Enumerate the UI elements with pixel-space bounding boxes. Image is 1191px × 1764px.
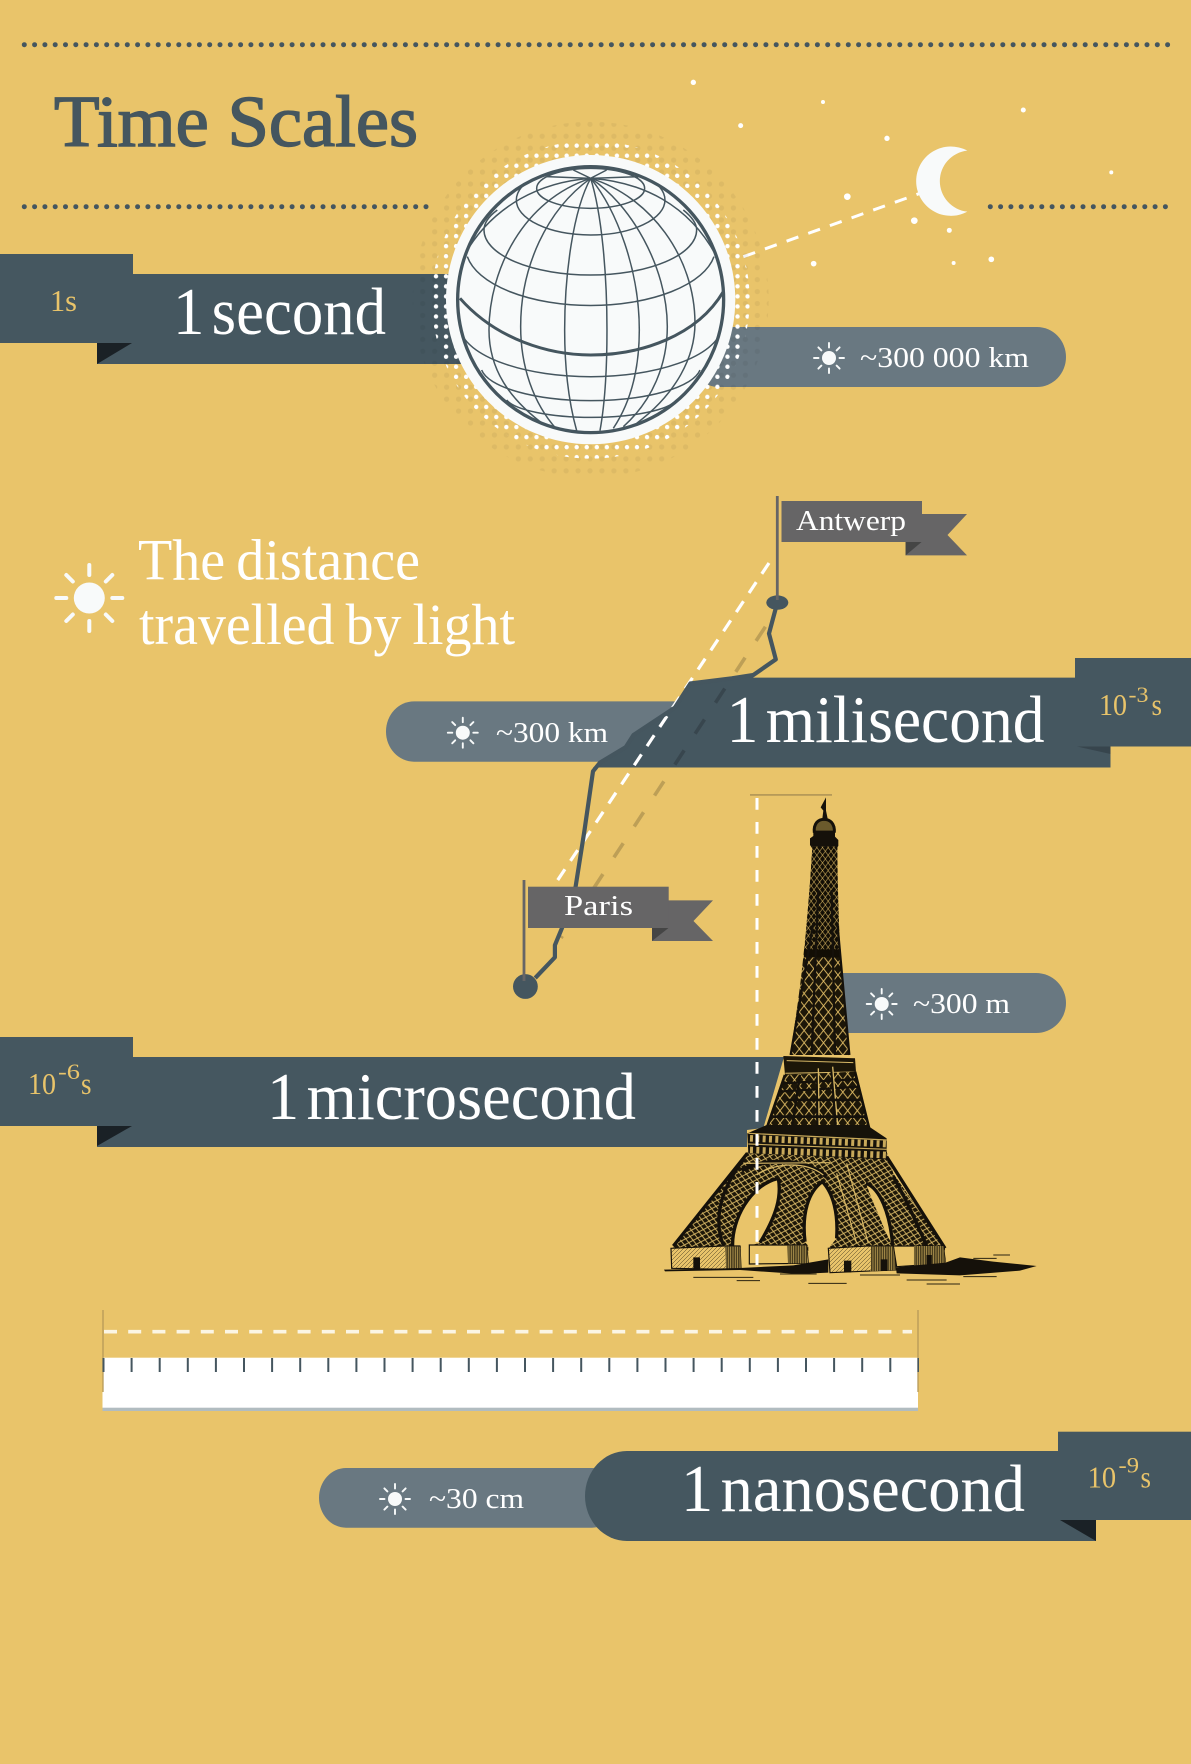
platform detail <box>785 1061 855 1073</box>
icon: sun <box>867 989 897 1019</box>
doors <box>693 1255 932 1272</box>
dashed line: direct light path <box>553 563 769 887</box>
ribbon: 1 nanosecond <box>585 1432 1191 1541</box>
pill: 300 km <box>386 701 706 762</box>
stars <box>691 80 1113 266</box>
flag label: Antwerp <box>796 505 906 537</box>
halftone dots: white <box>430 140 752 462</box>
dome <box>814 819 834 833</box>
ribbon label: 1 milisecond <box>727 683 1045 757</box>
tab label: -3 <box>1128 682 1148 707</box>
second platform <box>783 1056 856 1075</box>
base right <box>893 1246 946 1267</box>
dotted rule: left under title <box>24 204 430 209</box>
ribbon: 1 milisecond <box>593 658 1191 768</box>
legs <box>672 1152 945 1253</box>
tab label: 10 <box>1099 687 1127 722</box>
ruler body <box>102 1358 918 1411</box>
icon: large sun <box>56 565 122 631</box>
heading: the distance travelled by light <box>56 527 515 657</box>
ribbon label: 1 nanosecond <box>681 1452 1025 1526</box>
tab label: -9 <box>1118 1453 1139 1478</box>
shaft struts <box>791 890 849 1055</box>
pill: 30 cm <box>319 1468 619 1528</box>
tab label <box>28 1059 92 1101</box>
meridians <box>463 170 718 431</box>
ribbon label: 1 second <box>173 275 386 349</box>
dashed line: earth to moon <box>743 193 920 257</box>
dashed line: tan shadow <box>561 627 765 938</box>
tower upper part <box>763 797 872 1140</box>
arch band <box>742 1162 827 1177</box>
middle dark edges <box>763 1072 872 1138</box>
title: Time Scales <box>54 81 418 162</box>
middle struts <box>778 1072 860 1140</box>
pill: 300 000 km <box>690 327 1066 387</box>
ground shadow <box>664 1257 1037 1275</box>
ribbon label: 1 microsecond <box>267 1060 636 1134</box>
middle highlights <box>818 1067 839 1137</box>
shaft dark band <box>804 949 841 957</box>
tab label: 10 <box>1088 1459 1116 1494</box>
base centre right shade <box>871 1247 896 1271</box>
tab label: 1s <box>50 283 77 318</box>
middle section <box>763 1072 872 1138</box>
dark leg edges <box>673 1153 945 1248</box>
measure bar: tower top <box>750 794 832 796</box>
dotted rule: right under title <box>990 204 1166 209</box>
tab label: -6 <box>58 1059 80 1084</box>
flag: Antwerp <box>766 496 967 610</box>
platform rails <box>748 1133 887 1149</box>
base right shade <box>914 1246 946 1265</box>
globe outline <box>458 167 724 433</box>
ribbon: 1 microsecond <box>0 1037 784 1147</box>
lantern <box>810 831 838 850</box>
distance label: ~300 m <box>913 988 1010 1020</box>
tab label: s <box>81 1066 92 1101</box>
icon: sun <box>448 718 478 748</box>
distance label: ~300 km <box>496 717 608 749</box>
ground marks <box>693 1255 1010 1284</box>
tab label: s <box>1152 687 1162 722</box>
ribbon: 1 second <box>0 254 477 364</box>
first platform <box>747 1125 887 1159</box>
icon: sun <box>814 343 844 373</box>
arch opening middle <box>804 1182 837 1263</box>
tab label <box>1088 1453 1151 1494</box>
tab label: 10 <box>28 1066 56 1101</box>
base centre left <box>749 1245 808 1264</box>
arch highlights <box>743 1163 868 1243</box>
icon: sun <box>380 1484 410 1514</box>
halftone dots: outer <box>410 120 772 482</box>
dashed line: tower height <box>756 798 758 1265</box>
arch opening right <box>866 1183 893 1245</box>
ruler end markers <box>103 1310 918 1392</box>
ruler ticks <box>102 1358 919 1372</box>
base left shade <box>725 1247 741 1269</box>
icon: moon <box>916 146 967 216</box>
flag: Paris <box>513 880 713 999</box>
base left <box>671 1246 741 1269</box>
route: Antwerp to Paris <box>535 603 777 978</box>
shaft <box>790 847 849 1055</box>
shaft dense core <box>804 847 841 957</box>
platform windows <box>750 1138 886 1155</box>
pill: 300 m <box>841 973 1066 1033</box>
flag label: Paris <box>564 890 633 922</box>
dotted rule: top <box>24 42 1172 47</box>
equator <box>460 292 723 355</box>
distance label: ~300 000 km <box>860 342 1029 374</box>
tower lower part <box>664 1125 1037 1284</box>
spire and flag <box>821 797 828 819</box>
distance label: ~30 cm <box>429 1483 524 1515</box>
text line 2: travelled by light <box>139 592 515 657</box>
dashed line: 30 cm <box>104 1330 912 1333</box>
tab label: s <box>1140 1459 1151 1494</box>
text line 1: The distance <box>138 527 420 592</box>
base centre right <box>828 1246 896 1273</box>
ruler <box>102 1310 919 1411</box>
globe <box>446 155 735 444</box>
Eiffel tower <box>664 797 1037 1284</box>
arch opening left <box>733 1178 779 1265</box>
base centre left shade <box>787 1246 808 1263</box>
tab label <box>1099 682 1162 722</box>
latitude lines <box>460 165 722 417</box>
